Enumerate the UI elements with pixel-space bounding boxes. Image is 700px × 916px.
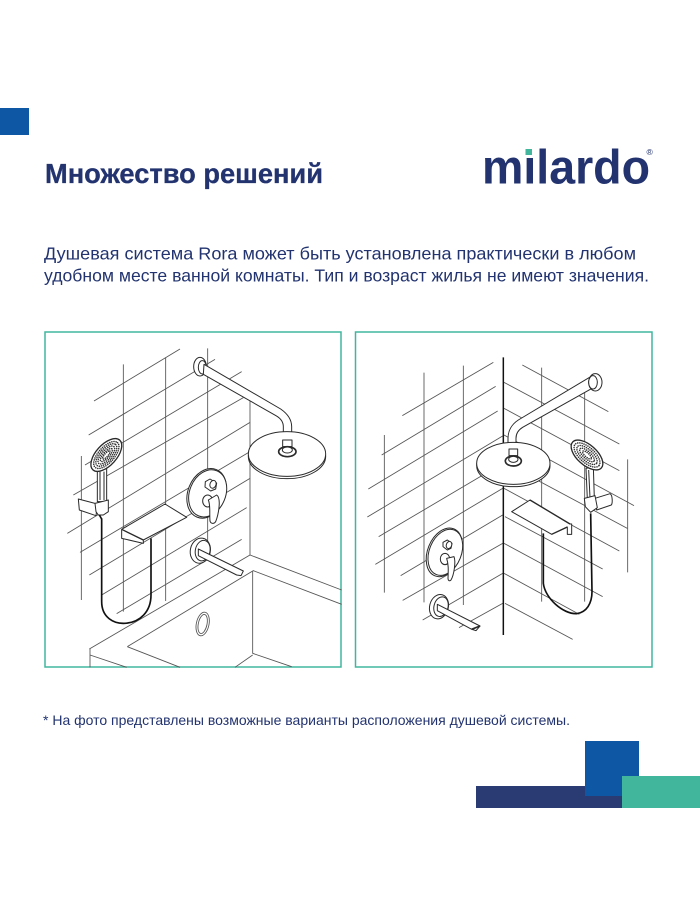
panel: shower system in room corner [356, 332, 652, 667]
corner accent square [0, 108, 29, 135]
icon: hand shower [566, 435, 612, 512]
panel: shower system over bathtub [45, 332, 342, 667]
decorative colour blocks [476, 741, 700, 808]
icon: hose [543, 513, 592, 614]
icon: mixer [419, 523, 469, 582]
icon: shelf [122, 504, 187, 543]
footnote: * На фото представлены возможные варианты расположения душевой системы. [43, 712, 570, 728]
title: Множество решений [45, 158, 323, 189]
icon: shelf [512, 500, 572, 534]
logo: milardo: ® [646, 147, 654, 157]
icon: spout [427, 592, 480, 631]
wall tile grid [67, 348, 250, 614]
icon: mixer [180, 463, 234, 524]
icon: hose [102, 518, 151, 623]
intro text [44, 244, 649, 286]
icon: hand shower [78, 433, 127, 519]
icon: shower arm and rain head [194, 357, 326, 479]
icon: shower arm and rain head [477, 374, 602, 487]
logo: milardo: milardo [482, 142, 650, 194]
icon: spout [188, 536, 243, 576]
intro text: Душевая система Rora может быть установлена практически в любом [44, 244, 636, 264]
bathtub [89, 555, 342, 667]
wall tile grid [367, 362, 634, 639]
room corner line [501, 357, 506, 635]
intro text: удобном месте ванной комнаты. Тип и возраст жилья не имеют значения. [44, 266, 649, 286]
